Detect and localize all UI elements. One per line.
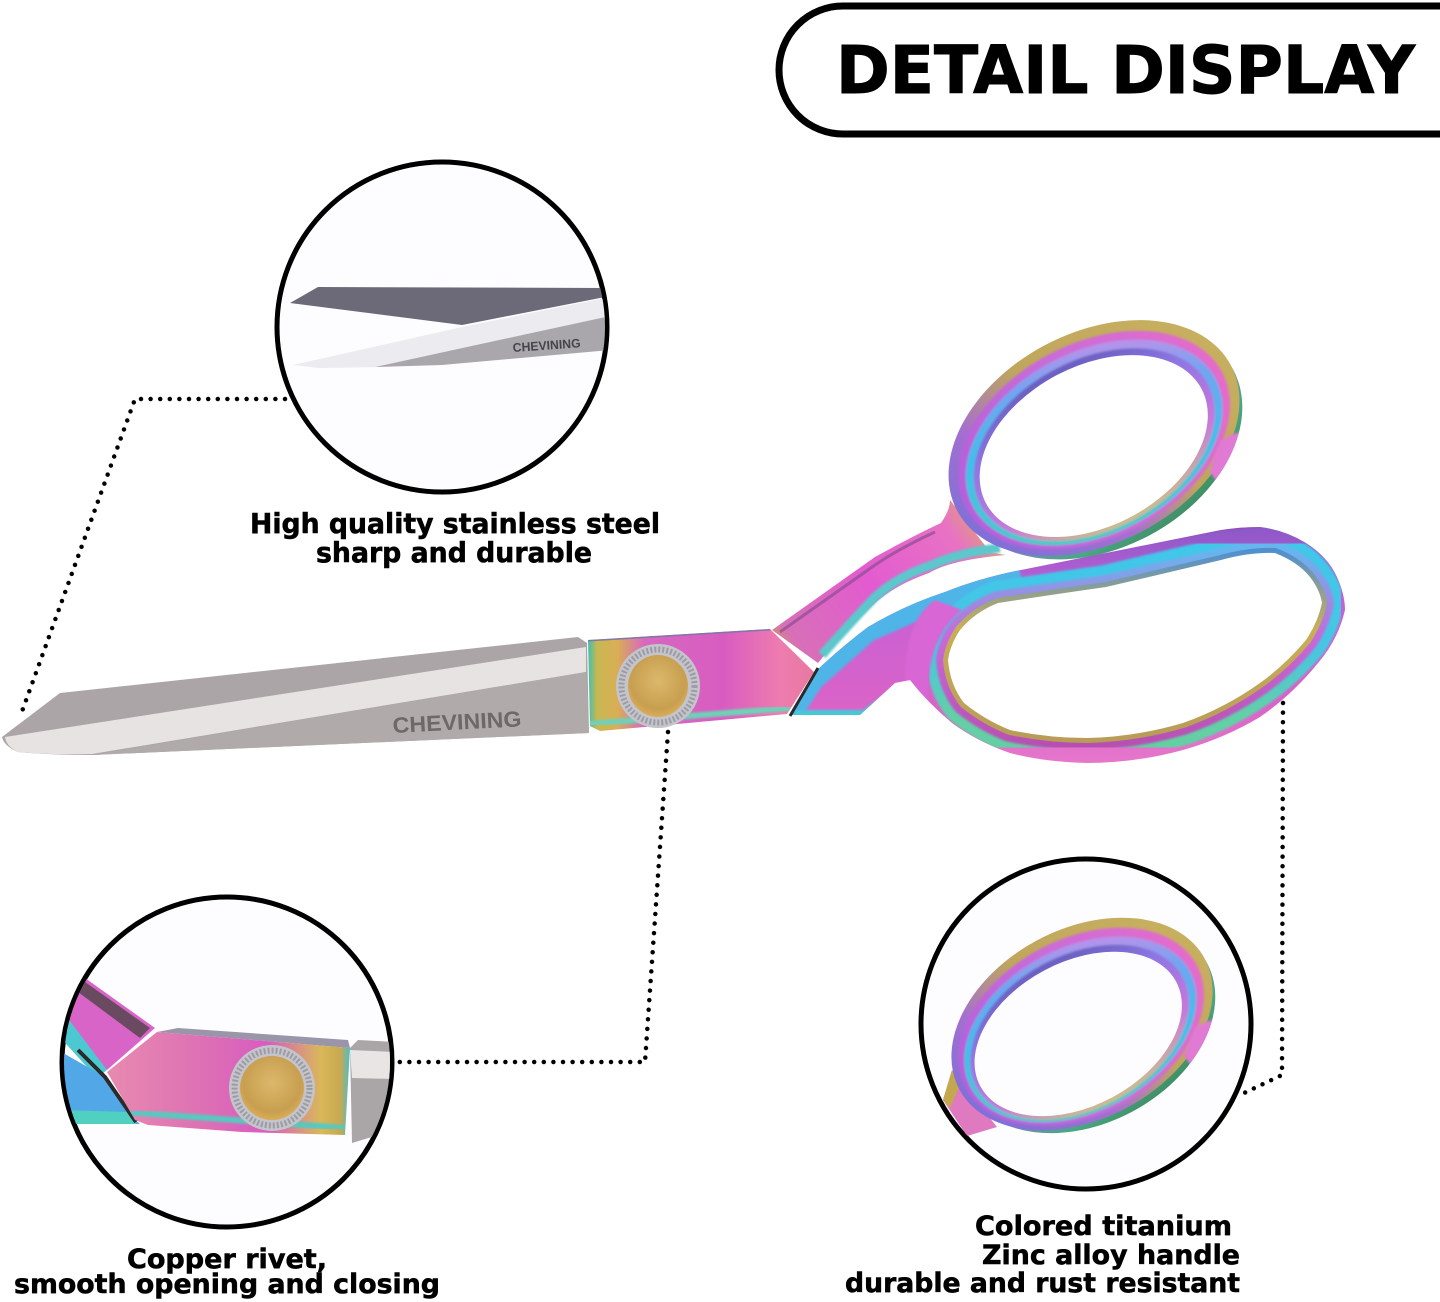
dotted connector: blade [20, 399, 285, 717]
rivet [616, 644, 700, 728]
upper handle neck [772, 500, 1006, 663]
detail circle: rivet [55, 897, 395, 1227]
pivot plate [588, 627, 818, 731]
label: handle [845, 1211, 1240, 1299]
dotted connector: handle [1240, 703, 1283, 1095]
lower finger loop [780, 520, 1350, 770]
scissors illustration [2, 273, 1350, 770]
label: handle: Zinc alloy handle [982, 1240, 1240, 1271]
label: blade: sharp and durable [316, 536, 592, 569]
label: blade [250, 507, 660, 569]
blade [2, 637, 589, 755]
label: rivet [14, 1244, 440, 1300]
dotted connector: rivet [395, 732, 668, 1062]
detail circle: blade [277, 162, 610, 492]
title pill [779, 6, 1440, 134]
detail circle: handle [915, 859, 1252, 1189]
label: blade: High quality stainless steel [250, 507, 660, 540]
blade: CHEVINING [392, 706, 522, 738]
label: handle: Colored titanium [975, 1211, 1232, 1242]
upper finger loop [948, 320, 1242, 560]
detail circle: blade: CHEVINING [512, 336, 581, 355]
label: rivet: smooth opening and closing [14, 1269, 440, 1300]
label: handle: durable and rust resistant [845, 1268, 1240, 1299]
title: DETAIL DISPLAY [836, 32, 1416, 109]
label: rivet: Copper rivet, [127, 1244, 327, 1275]
